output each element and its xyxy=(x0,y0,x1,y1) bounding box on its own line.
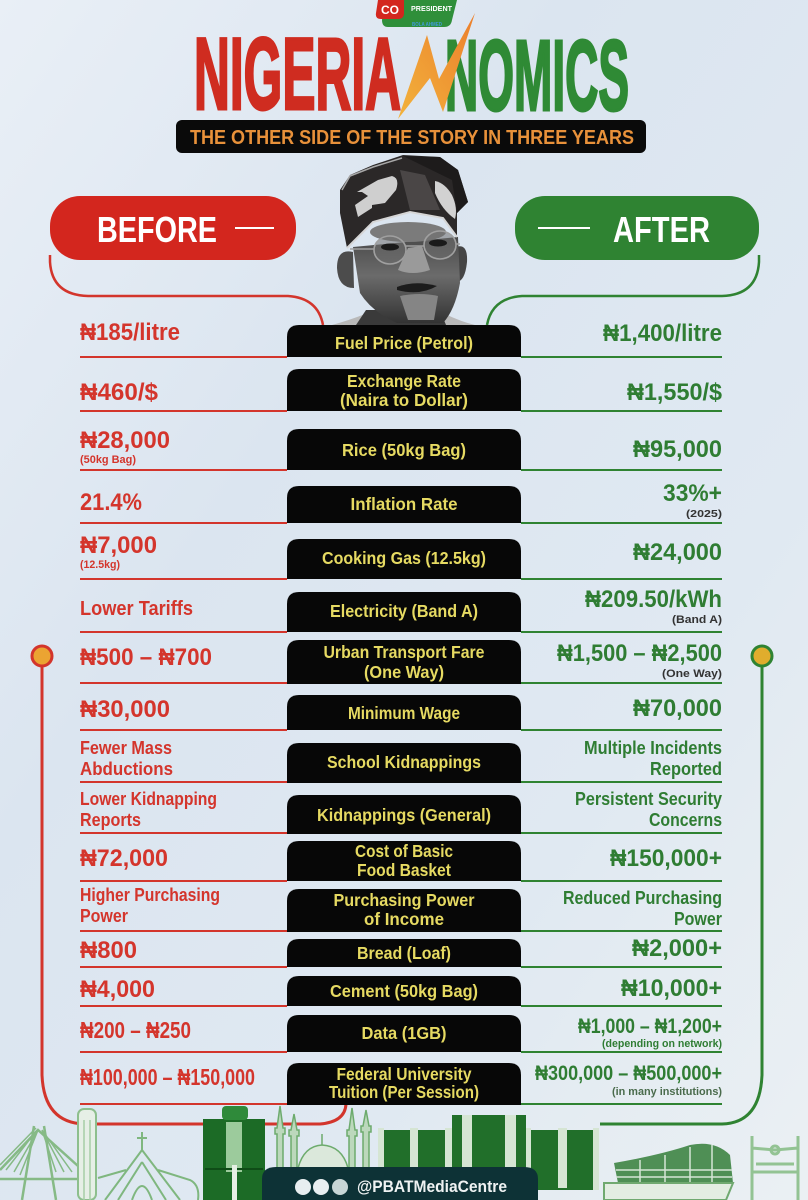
row: federal university tuition: (in many institutions) xyxy=(612,1086,722,1098)
row: rice: ₦28,000 xyxy=(80,427,170,454)
row: bread: Bread (Loaf) xyxy=(357,943,451,963)
row: school kidnappings: School Kidnappings xyxy=(327,752,481,772)
row: cement xyxy=(80,975,722,1007)
row: kidnappings general: Kidnappings (General) xyxy=(317,805,491,825)
row: exchange rate: (Naira to Dollar) xyxy=(340,390,468,410)
row: bread xyxy=(80,935,722,968)
row: federal university tuition xyxy=(80,1061,722,1105)
row: exchange rate: ₦1,550/$ xyxy=(627,379,722,406)
row: purchasing power: Higher Purchasing xyxy=(80,884,220,905)
row: purchasing power: Reduced Purchasing xyxy=(563,887,722,908)
logo: President Bola Ahmed: BOLA AHMED xyxy=(412,22,442,28)
row: inflation rate: (2025) xyxy=(686,508,722,520)
row: minimum wage xyxy=(80,695,722,731)
row: school kidnappings: Multiple Incidents xyxy=(584,737,722,758)
bracket: before timeline xyxy=(32,646,346,1124)
stadium xyxy=(604,1144,733,1200)
subtitle bar: THE OTHER SIDE OF THE STORY IN THREE YEARS xyxy=(190,126,634,149)
row: rice: ₦95,000 xyxy=(633,436,722,463)
connector: after to fuel row xyxy=(487,255,759,325)
gate xyxy=(752,1136,798,1200)
row: rice xyxy=(80,427,722,471)
row: minimum wage: ₦70,000 xyxy=(633,695,722,722)
row: cooking gas: ₦24,000 xyxy=(633,539,722,566)
row: minimum wage: Minimum Wage xyxy=(348,703,460,723)
row: urban transport fare: ₦1,500 – ₦2,500 xyxy=(557,640,722,667)
row: school kidnappings: Reported xyxy=(650,758,722,779)
after pill: AFTER xyxy=(613,209,710,250)
row: exchange rate: Exchange Rate xyxy=(347,371,461,391)
row: fuel price: Fuel Price (Petrol) xyxy=(335,333,473,353)
row: purchasing power: Power xyxy=(674,908,722,929)
row: purchasing power: Purchasing Power xyxy=(334,890,475,910)
bracket: after timeline xyxy=(600,646,772,1124)
minarets and dome xyxy=(275,1106,371,1168)
before pill: BEFORE xyxy=(97,209,217,250)
row: kidnappings general: Concerns xyxy=(649,809,722,830)
row: urban transport fare xyxy=(80,640,722,684)
row: cooking gas: (12.5kg) xyxy=(80,559,120,571)
row: data: (depending on network) xyxy=(602,1038,722,1050)
row: school kidnappings xyxy=(80,737,722,783)
row: urban transport fare: Urban Transport Fare xyxy=(324,642,485,662)
large green building xyxy=(378,1115,599,1200)
row: federal university tuition: Federal University xyxy=(336,1064,472,1084)
row: cost of basic food basket: ₦150,000+ xyxy=(610,845,722,872)
row: purchasing power: Power xyxy=(80,905,128,926)
row: rice: Rice (50kg Bag) xyxy=(342,440,466,460)
logo: President Bola Ahmed: CO xyxy=(381,3,399,17)
tower xyxy=(78,1109,96,1200)
row: data: Data (1GB) xyxy=(362,1023,446,1043)
subtitle bar xyxy=(176,120,646,153)
row: fuel price: ₦185/litre xyxy=(80,319,180,346)
row: kidnappings general xyxy=(80,788,723,834)
row: electricity: (Band A) xyxy=(672,614,722,626)
row: fuel price: ₦1,400/litre xyxy=(603,320,722,347)
icon: lightning bolt xyxy=(398,13,475,119)
row: cement: ₦10,000+ xyxy=(621,975,722,1002)
portrait: president xyxy=(332,155,475,325)
row: minimum wage: ₦30,000 xyxy=(80,696,170,723)
row: cement: Cement (50kg Bag) xyxy=(330,981,478,1001)
row: cost of basic food basket: Cost of Basic xyxy=(355,841,453,861)
logo: President Bola Ahmed: PRESIDENT xyxy=(411,6,453,13)
row: kidnappings general: Reports xyxy=(80,809,141,830)
title: Nigerianomics: NIGERIA xyxy=(194,17,401,131)
row: kidnappings general: Lower Kidnapping xyxy=(80,788,217,809)
row: data: ₦1,000 – ₦1,200+ xyxy=(578,1014,722,1038)
row: cooking gas xyxy=(80,532,722,580)
row: inflation rate: 21.4% xyxy=(80,489,142,516)
skyline: Abuja landmarks xyxy=(0,1106,798,1200)
row: data xyxy=(80,1014,722,1053)
row: cost of basic food basket: ₦72,000 xyxy=(80,845,168,872)
bridge xyxy=(0,1126,78,1200)
church xyxy=(98,1132,198,1200)
row: school kidnappings: Fewer Mass xyxy=(80,737,172,758)
row: exchange rate: ₦460/$ xyxy=(80,379,158,406)
row: electricity: ₦209.50/kWh xyxy=(585,586,722,613)
logo: President Bola Ahmed xyxy=(376,0,457,28)
row: federal university tuition: ₦300,000 – ₦500,000+ xyxy=(535,1061,722,1085)
row: federal university tuition: ₦100,000 – ₦150,000 xyxy=(80,1064,255,1090)
row: purchasing power: of Income xyxy=(364,909,444,929)
connector: before to fuel row xyxy=(50,255,323,325)
row: cooking gas: ₦7,000 xyxy=(80,532,157,559)
row: electricity: Electricity (Band A) xyxy=(330,601,478,621)
row: cooking gas: Cooking Gas (12.5kg) xyxy=(322,548,486,568)
row: urban transport fare: (One Way) xyxy=(662,668,722,680)
row: exchange rate xyxy=(80,369,722,412)
row: federal university tuition: Tuition (Per Session) xyxy=(329,1082,479,1102)
row: cement: ₦4,000 xyxy=(80,976,155,1003)
footer bar: social handle: @PBATMediaCentre xyxy=(357,1177,507,1196)
row: fuel price xyxy=(80,319,722,358)
row: bread: ₦2,000+ xyxy=(632,935,722,962)
row: data: ₦200 – ₦250 xyxy=(80,1017,191,1043)
row: school kidnappings: Abductions xyxy=(80,758,173,779)
row: cost of basic food basket xyxy=(80,841,722,882)
row: electricity xyxy=(80,586,722,633)
row: electricity: Lower Tariffs xyxy=(80,598,193,620)
row: cost of basic food basket: Food Basket xyxy=(357,860,451,880)
dark hotel tower xyxy=(203,1106,265,1200)
footer bar: social handle xyxy=(262,1167,538,1200)
row: inflation rate: Inflation Rate xyxy=(350,494,458,514)
before pill xyxy=(50,196,296,260)
row: purchasing power xyxy=(80,884,722,932)
row: inflation rate: 33%+ xyxy=(663,480,722,507)
after pill xyxy=(515,196,759,260)
row: urban transport fare: (One Way) xyxy=(364,662,444,682)
row: urban transport fare: ₦500 – ₦700 xyxy=(80,644,212,671)
row: bread: ₦800 xyxy=(80,937,137,964)
row: kidnappings general: Persistent Security xyxy=(575,788,723,809)
row: inflation rate xyxy=(80,480,722,524)
row: rice: (50kg Bag) xyxy=(80,454,136,466)
